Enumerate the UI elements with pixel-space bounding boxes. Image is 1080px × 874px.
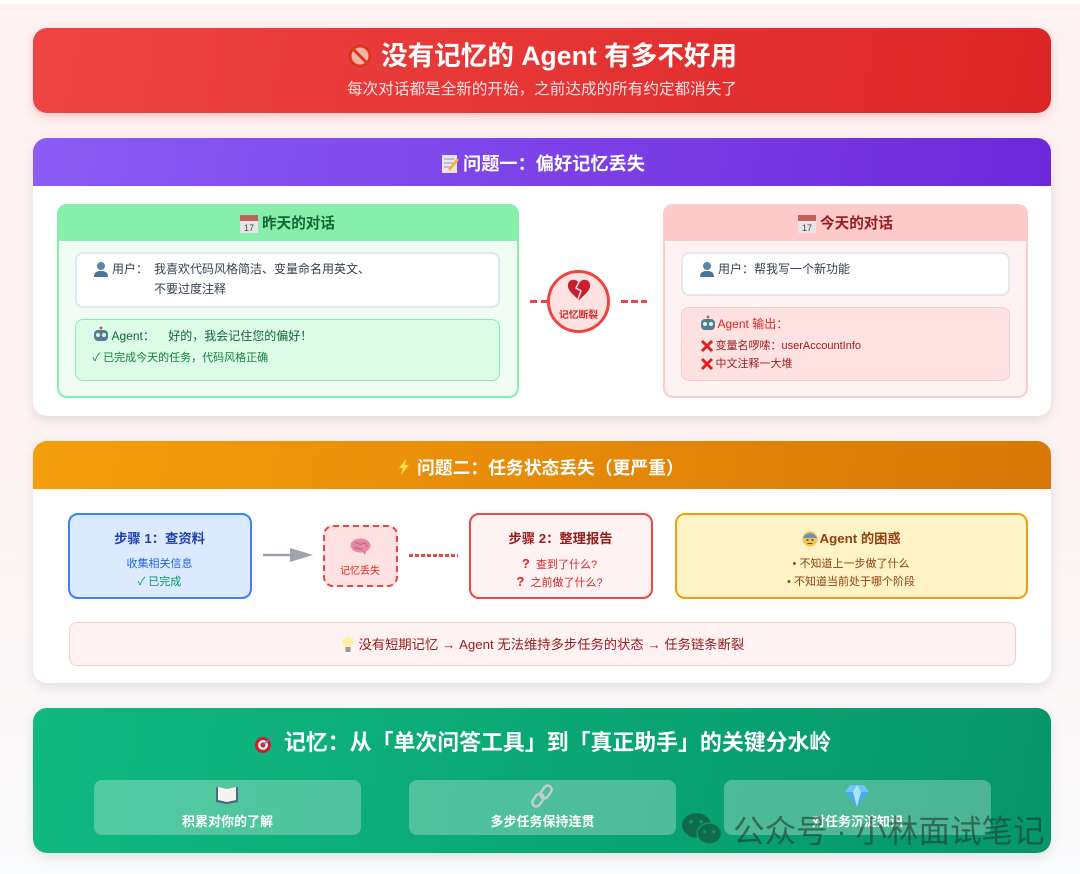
card: understanding [94, 780, 361, 835]
icon: anxious face [802, 532, 818, 546]
output issue two: 中文注释一大堆 [716, 358, 792, 370]
step two [469, 513, 653, 599]
icon: cross [701, 340, 713, 352]
yesterday header [57, 204, 519, 241]
icon: cross [701, 358, 713, 370]
memory break label: 记忆断裂 [559, 310, 598, 321]
icon: memo [442, 155, 459, 173]
card: knowledge [724, 780, 991, 835]
icon: calendar [798, 215, 816, 233]
panel: today conversation [663, 204, 1028, 398]
icon: lightning [399, 459, 409, 475]
subtitle: 每次对话都是全新的开始，之前达成的所有约定都消失了 [347, 81, 737, 98]
icon: calendar: 17 [244, 223, 254, 233]
agent confusion [675, 513, 1028, 599]
memory break badge [547, 270, 610, 333]
step two title: 步骤 2：整理报告 [508, 530, 613, 546]
watermark text: 公众号 · 小林面试笔记 [733, 813, 1044, 849]
agent output [681, 307, 1010, 381]
icon: target [255, 734, 274, 753]
icon: wechat [682, 813, 721, 844]
today title: 今天的对话 [820, 216, 893, 232]
user request [681, 252, 1010, 296]
card: continuity [409, 780, 676, 835]
icon: book [216, 787, 238, 804]
problem two title: 问题二：任务状态丢失（更严重） [417, 458, 684, 478]
step one [68, 513, 252, 599]
panel: yesterday conversation [57, 204, 519, 398]
icon: calendar: 17 [802, 223, 812, 233]
user message [75, 252, 500, 308]
agent reply [75, 319, 500, 381]
today header [663, 204, 1028, 241]
header banner [33, 28, 1051, 113]
problem two header [33, 441, 1051, 489]
title: 没有记忆的 Agent 有多不好用 [381, 41, 737, 71]
conclusion title: 记忆：从「单次问答工具」到「真正助手」的关键分水岭 [284, 730, 831, 755]
connector: left dashes [530, 300, 548, 303]
conclusion text: 没有短期记忆 → Agent 无法维持多步任务的状态 → 任务链条断裂 [358, 637, 744, 652]
agent reply text: Agent： 好的，我会记住您的偏好！ [112, 329, 312, 343]
yesterday title: 昨天的对话 [262, 216, 335, 232]
watermark [682, 813, 1044, 849]
problem one header [33, 138, 1051, 186]
icon: light bulb [342, 636, 354, 652]
icon: robot [94, 326, 108, 341]
step two question one: ? 查到了什么? [522, 556, 597, 570]
user request text: 用户：帮我写一个新功能 [718, 262, 850, 276]
user text: 不要过度注释 [154, 282, 226, 296]
confusion item two: • 不知道当前处于哪个阶段 [787, 576, 915, 588]
icon: link [531, 784, 553, 808]
icon: user [700, 262, 714, 277]
icon: robot [701, 316, 715, 330]
output issue one: 变量名啰嗦：userAccountInfo [716, 340, 861, 352]
connector: right dashes [621, 300, 647, 303]
user text: 我喜欢代码风格简洁、变量命名用英文、 [154, 262, 370, 276]
icon: gem [845, 785, 869, 807]
user text [154, 262, 370, 296]
confusion item one: • 不知道上一步做了什么 [793, 558, 909, 570]
step two question two: ? 之前做了什么? [516, 574, 603, 588]
panel: problem one [33, 138, 1051, 416]
panel: conclusion [33, 708, 1051, 853]
arrow: step one to memory loss [263, 548, 313, 562]
memory loss label: 记忆丢失 [340, 566, 380, 577]
completion note: ✓ 已完成今天的任务，代码风格正确 [92, 352, 268, 364]
panel: problem two [33, 441, 1051, 683]
icon: broken heart [568, 280, 590, 300]
connector: broken link [409, 554, 458, 557]
agent output label: Agent 输出： [718, 317, 788, 331]
icon: prohibited [348, 44, 372, 68]
conclusion note [69, 622, 1016, 666]
continuity label: 多步任务保持连贯 [490, 814, 594, 829]
problem one title: 问题一：偏好记忆丢失 [463, 154, 645, 174]
understanding label: 积累对你的了解 [182, 814, 273, 829]
icon: calendar [240, 215, 258, 233]
step one description: 收集相关信息 [126, 558, 192, 570]
memory loss box [323, 525, 398, 587]
step one status: ✓ 已完成 [138, 576, 181, 588]
confusion title: Agent 的困惑 [820, 530, 901, 546]
icon: brain [350, 538, 370, 555]
step one title: 步骤 1：查资料 [114, 530, 205, 546]
knowledge label: 对任务沉淀知识 [812, 814, 903, 829]
icon: user [94, 262, 108, 277]
user label: 用户： [112, 262, 148, 276]
